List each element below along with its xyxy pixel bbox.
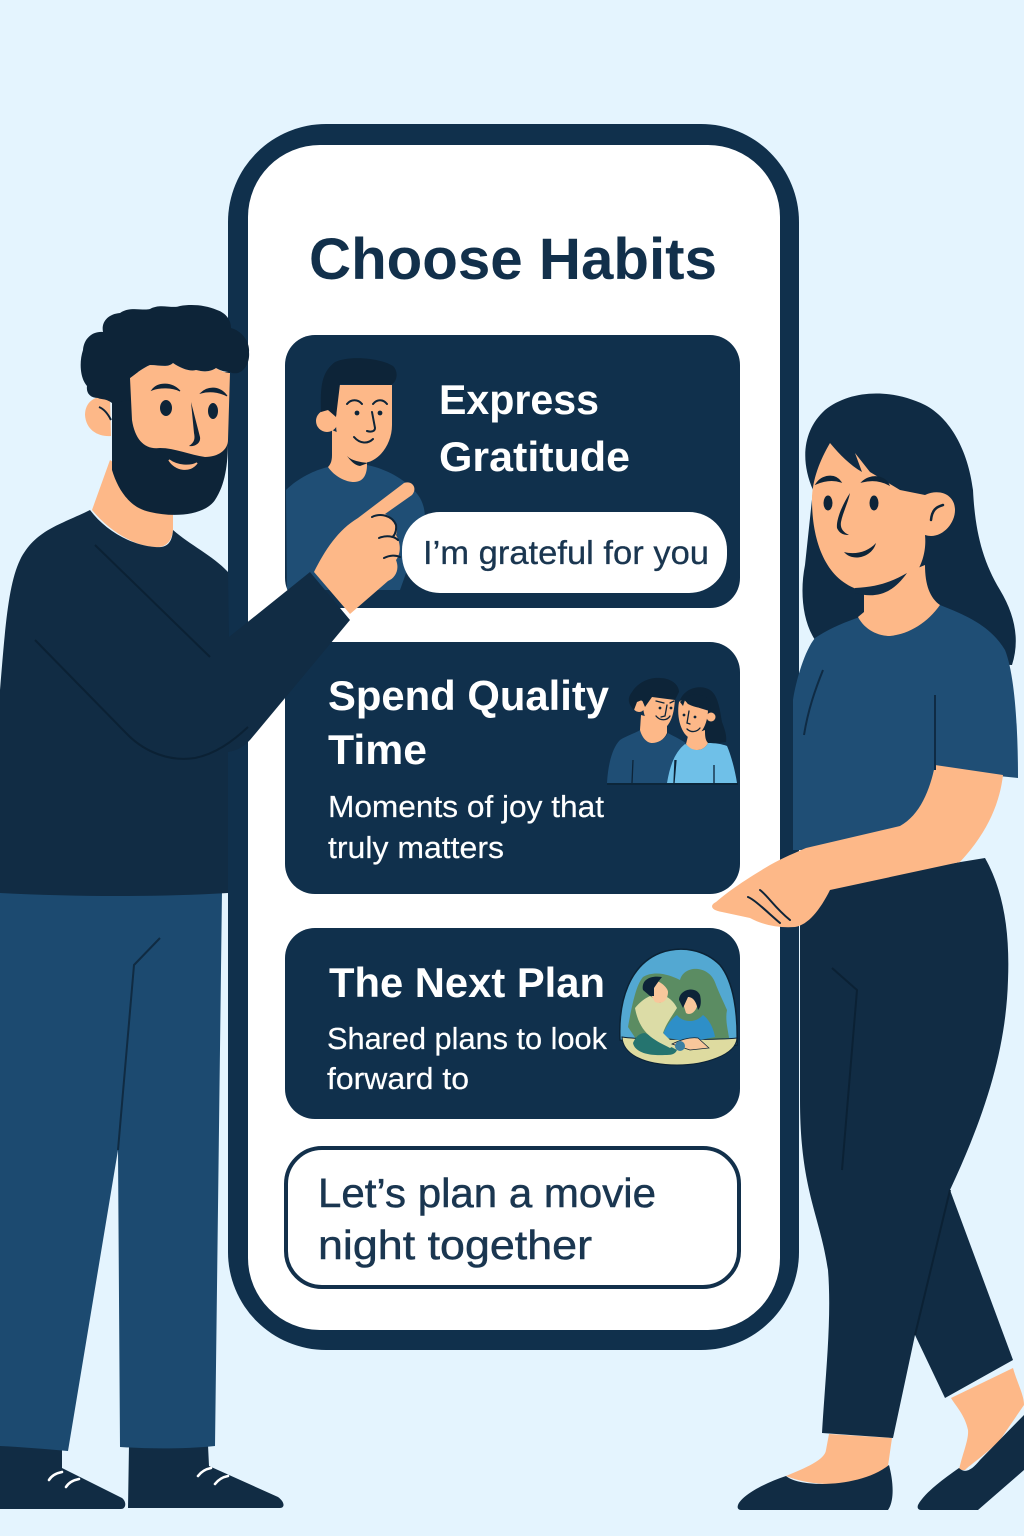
man neck and ear	[85, 397, 173, 547]
man pointing hand	[314, 482, 414, 614]
figure: woman	[712, 394, 1024, 1510]
shirt creases	[804, 670, 935, 770]
speech pill: I’m grateful for you	[423, 534, 709, 571]
man trousers	[0, 890, 222, 1451]
card text: Shared plans to look	[327, 1021, 607, 1056]
speech pill	[402, 512, 727, 593]
card text: truly matters	[328, 830, 504, 865]
card heading: spend quality time: Spend Quality	[328, 672, 610, 719]
message text: Let’s plan a movie	[318, 1170, 656, 1216]
icon: couple portrait	[607, 678, 738, 784]
woman neck	[858, 565, 940, 636]
woman hair back	[802, 394, 1016, 665]
panel: movie night message	[286, 1148, 739, 1287]
card heading: express gratitude: Gratitude	[439, 433, 630, 480]
sweater creases	[35, 545, 248, 759]
card text: forward to	[327, 1061, 469, 1096]
trouser crease	[118, 938, 160, 1150]
card text: Moments of joy that	[328, 789, 604, 824]
icon: couple planning	[620, 949, 737, 1065]
panel: spend quality time	[285, 642, 740, 894]
man sweater	[0, 510, 350, 896]
woman arm and hand	[712, 765, 1003, 927]
card heading: spend quality time: Time	[328, 726, 427, 773]
title: Choose Habits	[309, 227, 717, 292]
panel: the next plan	[285, 928, 740, 1119]
man head	[81, 305, 249, 515]
card heading: express gratitude: Express	[439, 376, 599, 423]
woman legs	[738, 858, 1024, 1510]
icon: smiling man portrait	[286, 358, 425, 590]
woman face	[812, 443, 955, 595]
phone frame	[228, 124, 799, 1350]
card heading: the next plan: The Next Plan	[329, 959, 605, 1006]
figure: man pointing	[0, 305, 414, 1509]
message text: night together	[318, 1222, 592, 1268]
panel: express gratitude	[285, 335, 740, 608]
woman shirt	[793, 605, 1018, 850]
man boots	[0, 1445, 284, 1509]
